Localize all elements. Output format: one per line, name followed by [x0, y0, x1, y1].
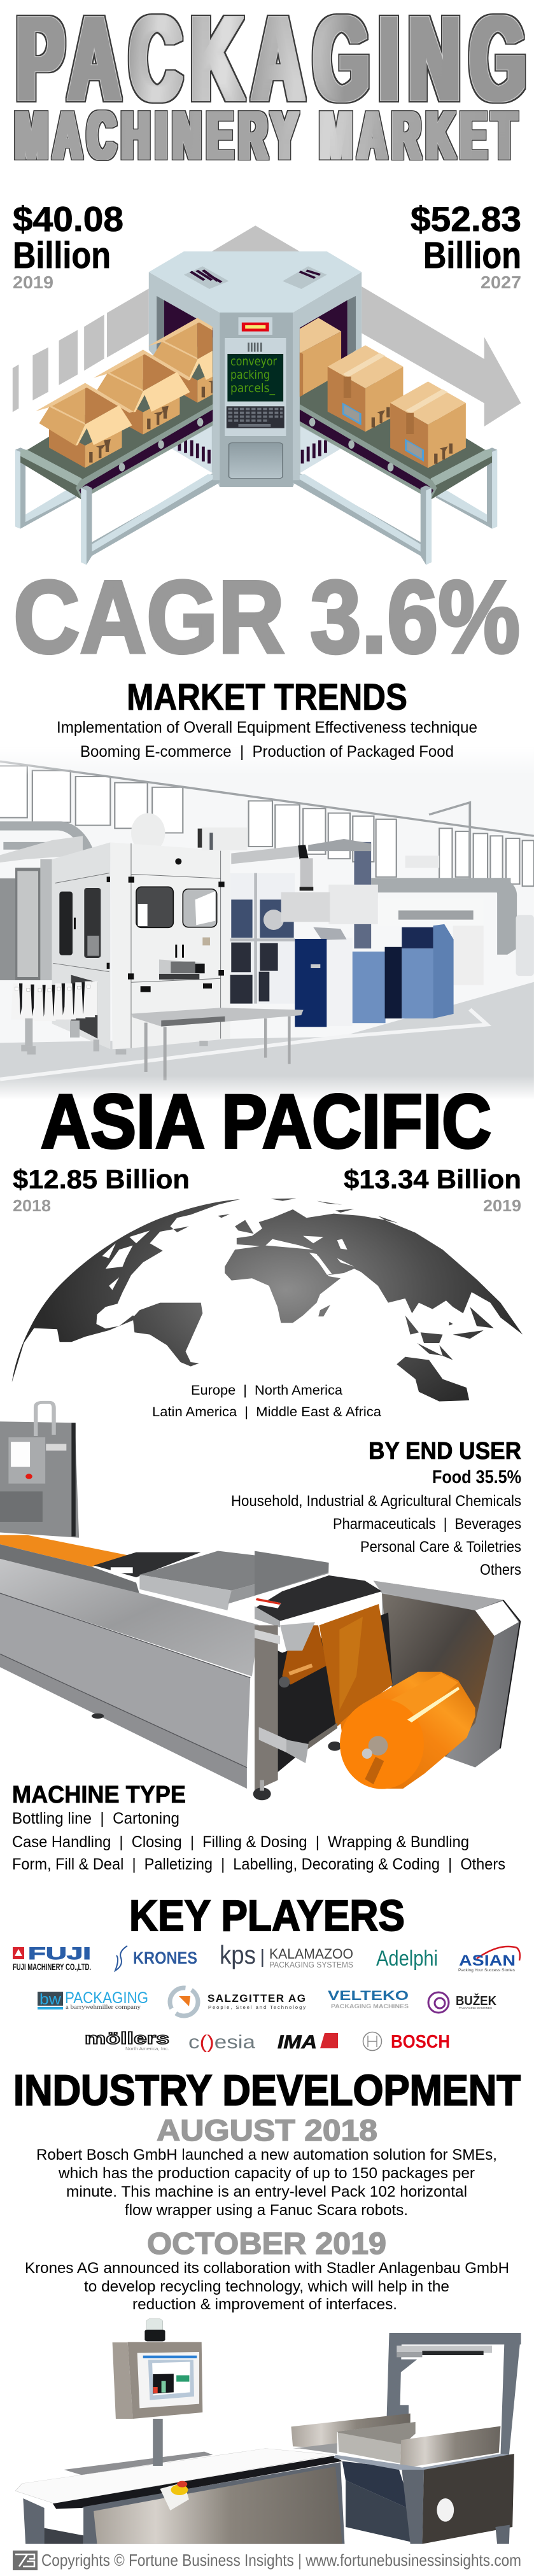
logo: buzek: PACKAGING MACHINES: [459, 2006, 492, 2009]
cable tray and box: [308, 839, 378, 948]
indicator light: [238, 317, 272, 335]
machine type: MACHINE TYPE: [12, 1782, 186, 1808]
africa: [225, 1246, 341, 1323]
logo: asian: [458, 1946, 520, 1973]
tray unit: [159, 959, 205, 980]
heading: key players: KEY PLAYERS: [129, 1891, 405, 1940]
machine type: [12, 1782, 505, 1873]
front film: [320, 1604, 393, 1727]
machine type: Form, Fill & Deal | Palletizing | Labelling, Decorating & Coding | Others: [12, 1855, 505, 1873]
logo: fuji: [13, 1944, 91, 1973]
logo: asian: Packing Your Success Stories: [458, 1969, 515, 1973]
machine screen text: [230, 355, 277, 395]
open boxes: [36, 318, 246, 468]
market value 2019: [13, 199, 123, 292]
development: october 2019: Krones AG announced its collaboration with Stadler Anlagenbau GmbH: [25, 2260, 509, 2277]
development: october 2019: OCTOBER 2019: [147, 2227, 386, 2261]
heading: asia pacific: ASIA PACIFIC: [41, 1079, 491, 1164]
icon: fortune business insights logo: [13, 2551, 38, 2570]
development: august 2018: [36, 2113, 497, 2219]
market value 2027: Billion: [423, 235, 521, 276]
photo fade into white: [0, 1076, 534, 1100]
monitor pole: [153, 2419, 163, 2466]
heat box: [139, 1551, 328, 1610]
rear film: [282, 1625, 327, 1685]
left leg: [23, 2498, 83, 2544]
pouch row: [11, 982, 97, 1021]
machine lower panel: [0, 1654, 247, 1789]
logo: bw packaging: bw: [39, 1991, 62, 2008]
back wall: [291, 2414, 411, 2449]
perforated plate: [94, 1552, 201, 1577]
photo: checkweigher machine: [15, 2319, 521, 2544]
title line: machinery market: MACHINERY MARKET: [15, 98, 523, 173]
machine left wing: [149, 272, 220, 487]
machine side face: [52, 842, 110, 1049]
by end user: [231, 1438, 521, 1579]
logo: ima: [278, 2032, 338, 2053]
actuator: [397, 2346, 492, 2357]
development: august 2018: which has the production capacity of up to 150 packages per: [58, 2165, 475, 2182]
by end user: BY END USER: [369, 1438, 521, 1465]
logo: mollers: North America, Inc.: [125, 2047, 169, 2052]
signal tower: [198, 827, 247, 850]
development: august 2018: minute. This machine is an entry-level Pack 102 horizontal: [66, 2183, 467, 2200]
control panel: [225, 338, 286, 436]
crossbar: [346, 2481, 412, 2542]
control tower: [0, 1402, 79, 1538]
asia pacific value 2019: $13.34 Billion: [344, 1164, 521, 1194]
footer: [13, 2551, 521, 2570]
development: august 2018: AUGUST 2018: [157, 2113, 377, 2147]
side windows: [59, 888, 101, 958]
feet: [253, 1742, 342, 1800]
logos: [13, 1940, 520, 2053]
development: august 2018: flow wrapper using a Fanuc Scara robots.: [125, 2202, 408, 2219]
machine type: Bottling line | Cartoning: [12, 1810, 179, 1827]
photo: white packaging machine: [0, 827, 330, 1080]
machine screen text: parcels_: [230, 381, 275, 395]
monitor: [113, 2342, 202, 2419]
black rail: [53, 2456, 342, 2509]
blue cabinets: [313, 924, 454, 1026]
by end user: Personal Care & Toiletries: [360, 1538, 521, 1556]
section heading: market trends: MARKET TRENDS: [127, 677, 407, 718]
machine side rail: [0, 1559, 259, 1677]
by end user: Pharmaceuticals | Beverages: [333, 1516, 521, 1533]
logo: buzek: [428, 1992, 497, 2013]
right cabinet: [402, 2454, 514, 2544]
orange trays: [0, 1535, 133, 1566]
photo: factory background: [0, 748, 534, 1099]
machine type: Case Handling | Closing | Filling & Dosing | Wrapping & Bundling: [12, 1833, 469, 1851]
asia pacific value 2019: 2019: [483, 1196, 521, 1215]
australia: [397, 1357, 469, 1402]
development: august 2018: Robert Bosch GmbH launched a new automation solution for SMEs,: [36, 2146, 497, 2164]
front stainless panel: [83, 2462, 344, 2544]
machine legs: [21, 1018, 208, 1055]
logo: ima: IMA: [278, 2032, 317, 2053]
factory floor: [0, 982, 534, 1099]
closed boxes: [300, 318, 466, 468]
logo: buzek: BUŽEK: [456, 1993, 497, 2008]
cable arm: [231, 845, 330, 922]
development: october 2019: [25, 2227, 509, 2313]
logo: velteko: VELTEKO: [328, 1988, 409, 2003]
right conveyor belt: [293, 337, 497, 565]
icon: growth arrow behind machine: [13, 225, 521, 426]
market value 2027: 2027: [481, 272, 521, 292]
trend line 1: Implementation of Overall Equipment Effectiveness technique: [57, 719, 477, 736]
emergency stop: [160, 2481, 189, 2510]
top plate: [255, 1551, 382, 1628]
rear table: [64, 2452, 213, 2475]
logo: krones: [115, 1946, 197, 1971]
market value 2027: [411, 199, 521, 292]
development: october 2019: to develop recycling technology, which will help in the: [84, 2278, 449, 2295]
top rail: [0, 1544, 139, 1594]
photo: thermoforming machine end with film roll: [253, 1551, 520, 1800]
logo: kalamazoo: [220, 1940, 353, 1969]
steel table: [132, 1008, 304, 1080]
north america: [12, 1199, 240, 1383]
lower machine opening: [71, 975, 97, 1039]
asia pacific value 2019: [344, 1164, 521, 1215]
logo: bw packaging: PACKAGING: [65, 1989, 148, 2007]
asia pacific value 2018: $12.85 Billion: [13, 1164, 190, 1194]
machine column strips: [213, 313, 300, 480]
trend line 2: Booming E-commerce | Production of Packaged Food: [80, 743, 454, 761]
logo: kalamazoo: KALAMAZOO: [269, 1946, 353, 1962]
logo: krones: KRONES: [133, 1948, 197, 1967]
machine right wing: [293, 272, 362, 487]
orange film roll: [340, 1672, 475, 1789]
logo: asian: ASIAN: [459, 1952, 516, 1969]
factory windows: [0, 766, 534, 886]
background doorway: [0, 836, 83, 980]
white belt: [15, 2449, 334, 2503]
front hardware: [74, 858, 225, 992]
southeast asia islands: [405, 1307, 494, 1360]
photo: thermoforming machine body: [0, 1402, 328, 1789]
greenland and arctic: [218, 1199, 398, 1234]
navy cabinet: [295, 939, 327, 1027]
logo: salzgitter: SALZGITTER AG: [207, 1992, 306, 2004]
logo: kalamazoo: kps: [220, 1940, 256, 1969]
logo: bosch: BOSCH: [391, 2032, 450, 2052]
eurasia: [237, 1209, 523, 1335]
dark mechanism interior: [269, 1612, 393, 1774]
logo: fuji: FUJI MACHINERY CO.,LTD.: [13, 1962, 91, 1973]
logo: salzgitter: [170, 1988, 306, 2016]
machine door: [229, 443, 283, 479]
frame brackets: [255, 1622, 337, 1791]
market value 2027: $52.83: [411, 199, 521, 239]
other regions: [152, 1383, 381, 1419]
logo: mollers: [85, 2029, 169, 2052]
chute: [342, 2461, 412, 2510]
logo: bw packaging: [38, 1989, 148, 2010]
by end user: Food 35.5%: [432, 1467, 521, 1488]
illustration: conveyor packing machine: [15, 251, 497, 565]
factory ducts: [0, 813, 534, 976]
logo: kalamazoo: PACKAGING SYSTEMS: [269, 1960, 353, 1969]
bin: [293, 2422, 512, 2470]
signal light: [144, 2319, 165, 2341]
logo: mollers: möllers: [85, 2029, 169, 2048]
madagascar: [318, 1305, 330, 1316]
logo: adelphi: Adelphi: [376, 1946, 438, 1971]
machine side panel: [0, 1593, 250, 1768]
title: [15, 0, 534, 173]
logo: fuji: FUJI: [28, 1944, 91, 1963]
market value 2019: $40.08: [13, 199, 123, 239]
machine screen text: conveyor: [230, 355, 277, 369]
asia pacific value 2018: 2018: [13, 1196, 51, 1215]
seas and lakes: [102, 1230, 354, 1290]
logo: coesia: c()esia: [188, 2032, 255, 2053]
logo: bosch: [363, 2032, 450, 2052]
icon: world globe: [12, 1199, 523, 1402]
south america: [133, 1303, 202, 1367]
logo: velteko: PACKAGING MACHINES: [331, 2003, 409, 2010]
market value 2019: Billion: [13, 235, 111, 276]
logo: bw packaging: a barrywehmiller company: [66, 2004, 141, 2010]
logo: velteko: [328, 1988, 409, 2010]
development: october 2019: reduction & improvement of interfaces.: [132, 2296, 397, 2313]
machine screen text: packing: [230, 368, 270, 382]
end panel: [374, 1580, 520, 1768]
gantry: [386, 2333, 521, 2455]
machine front face: [110, 842, 230, 1049]
market value 2019: 2019: [13, 272, 53, 292]
left conveyor belt: [15, 337, 220, 565]
other regions: Latin America | Middle East & Africa: [152, 1405, 381, 1419]
asia pacific value 2018: [13, 1164, 190, 1215]
by end user: Others: [480, 1561, 521, 1579]
center machine works: [230, 873, 295, 1004]
machine column: [220, 313, 293, 487]
logo: salzgitter: People, Steel and Technology: [208, 2004, 306, 2010]
front windows: [136, 887, 217, 927]
rear white panel: [378, 898, 484, 985]
other regions: Europe | North America: [191, 1383, 342, 1398]
machine top: [149, 251, 362, 313]
